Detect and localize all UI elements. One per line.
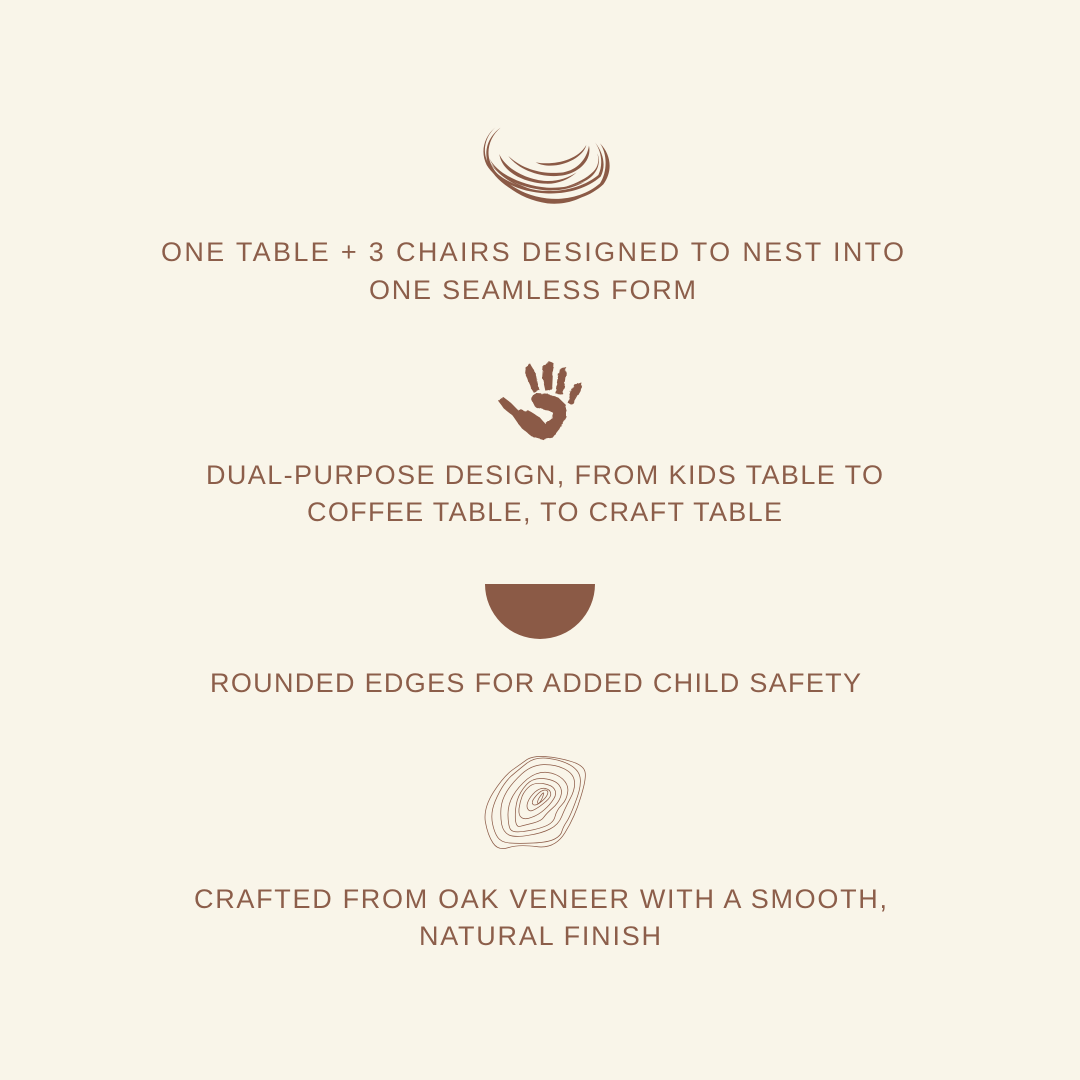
heading: nesting feature: ONE SEAMLESS FORM — [369, 275, 696, 305]
heading: dual-purpose feature: COFFEE TABLE, TO CRAFT TABLE — [307, 497, 782, 527]
heading: oak veneer feature — [194, 884, 887, 951]
heading: nesting feature: ONE TABLE + 3 CHAIRS DESIGNED TO NEST INTO — [161, 237, 904, 267]
icon: nest of curved lines — [483, 127, 610, 204]
heading: nesting feature — [161, 237, 904, 305]
heading: oak veneer feature: CRAFTED FROM OAK VENEER WITH A SMOOTH, — [194, 884, 887, 914]
heading: dual-purpose feature: DUAL-PURPOSE DESIGN, FROM KIDS TABLE TO — [206, 460, 883, 490]
heading: oak veneer feature: NATURAL FINISH — [419, 921, 661, 951]
icon: half circle — [485, 584, 595, 639]
icon: handprint — [498, 361, 582, 440]
heading: dual-purpose feature — [206, 460, 883, 527]
icon: wood grain rings — [485, 756, 585, 849]
heading: rounded edges feature: ROUNDED EDGES FOR ADDED CHILD SAFETY — [210, 668, 861, 698]
